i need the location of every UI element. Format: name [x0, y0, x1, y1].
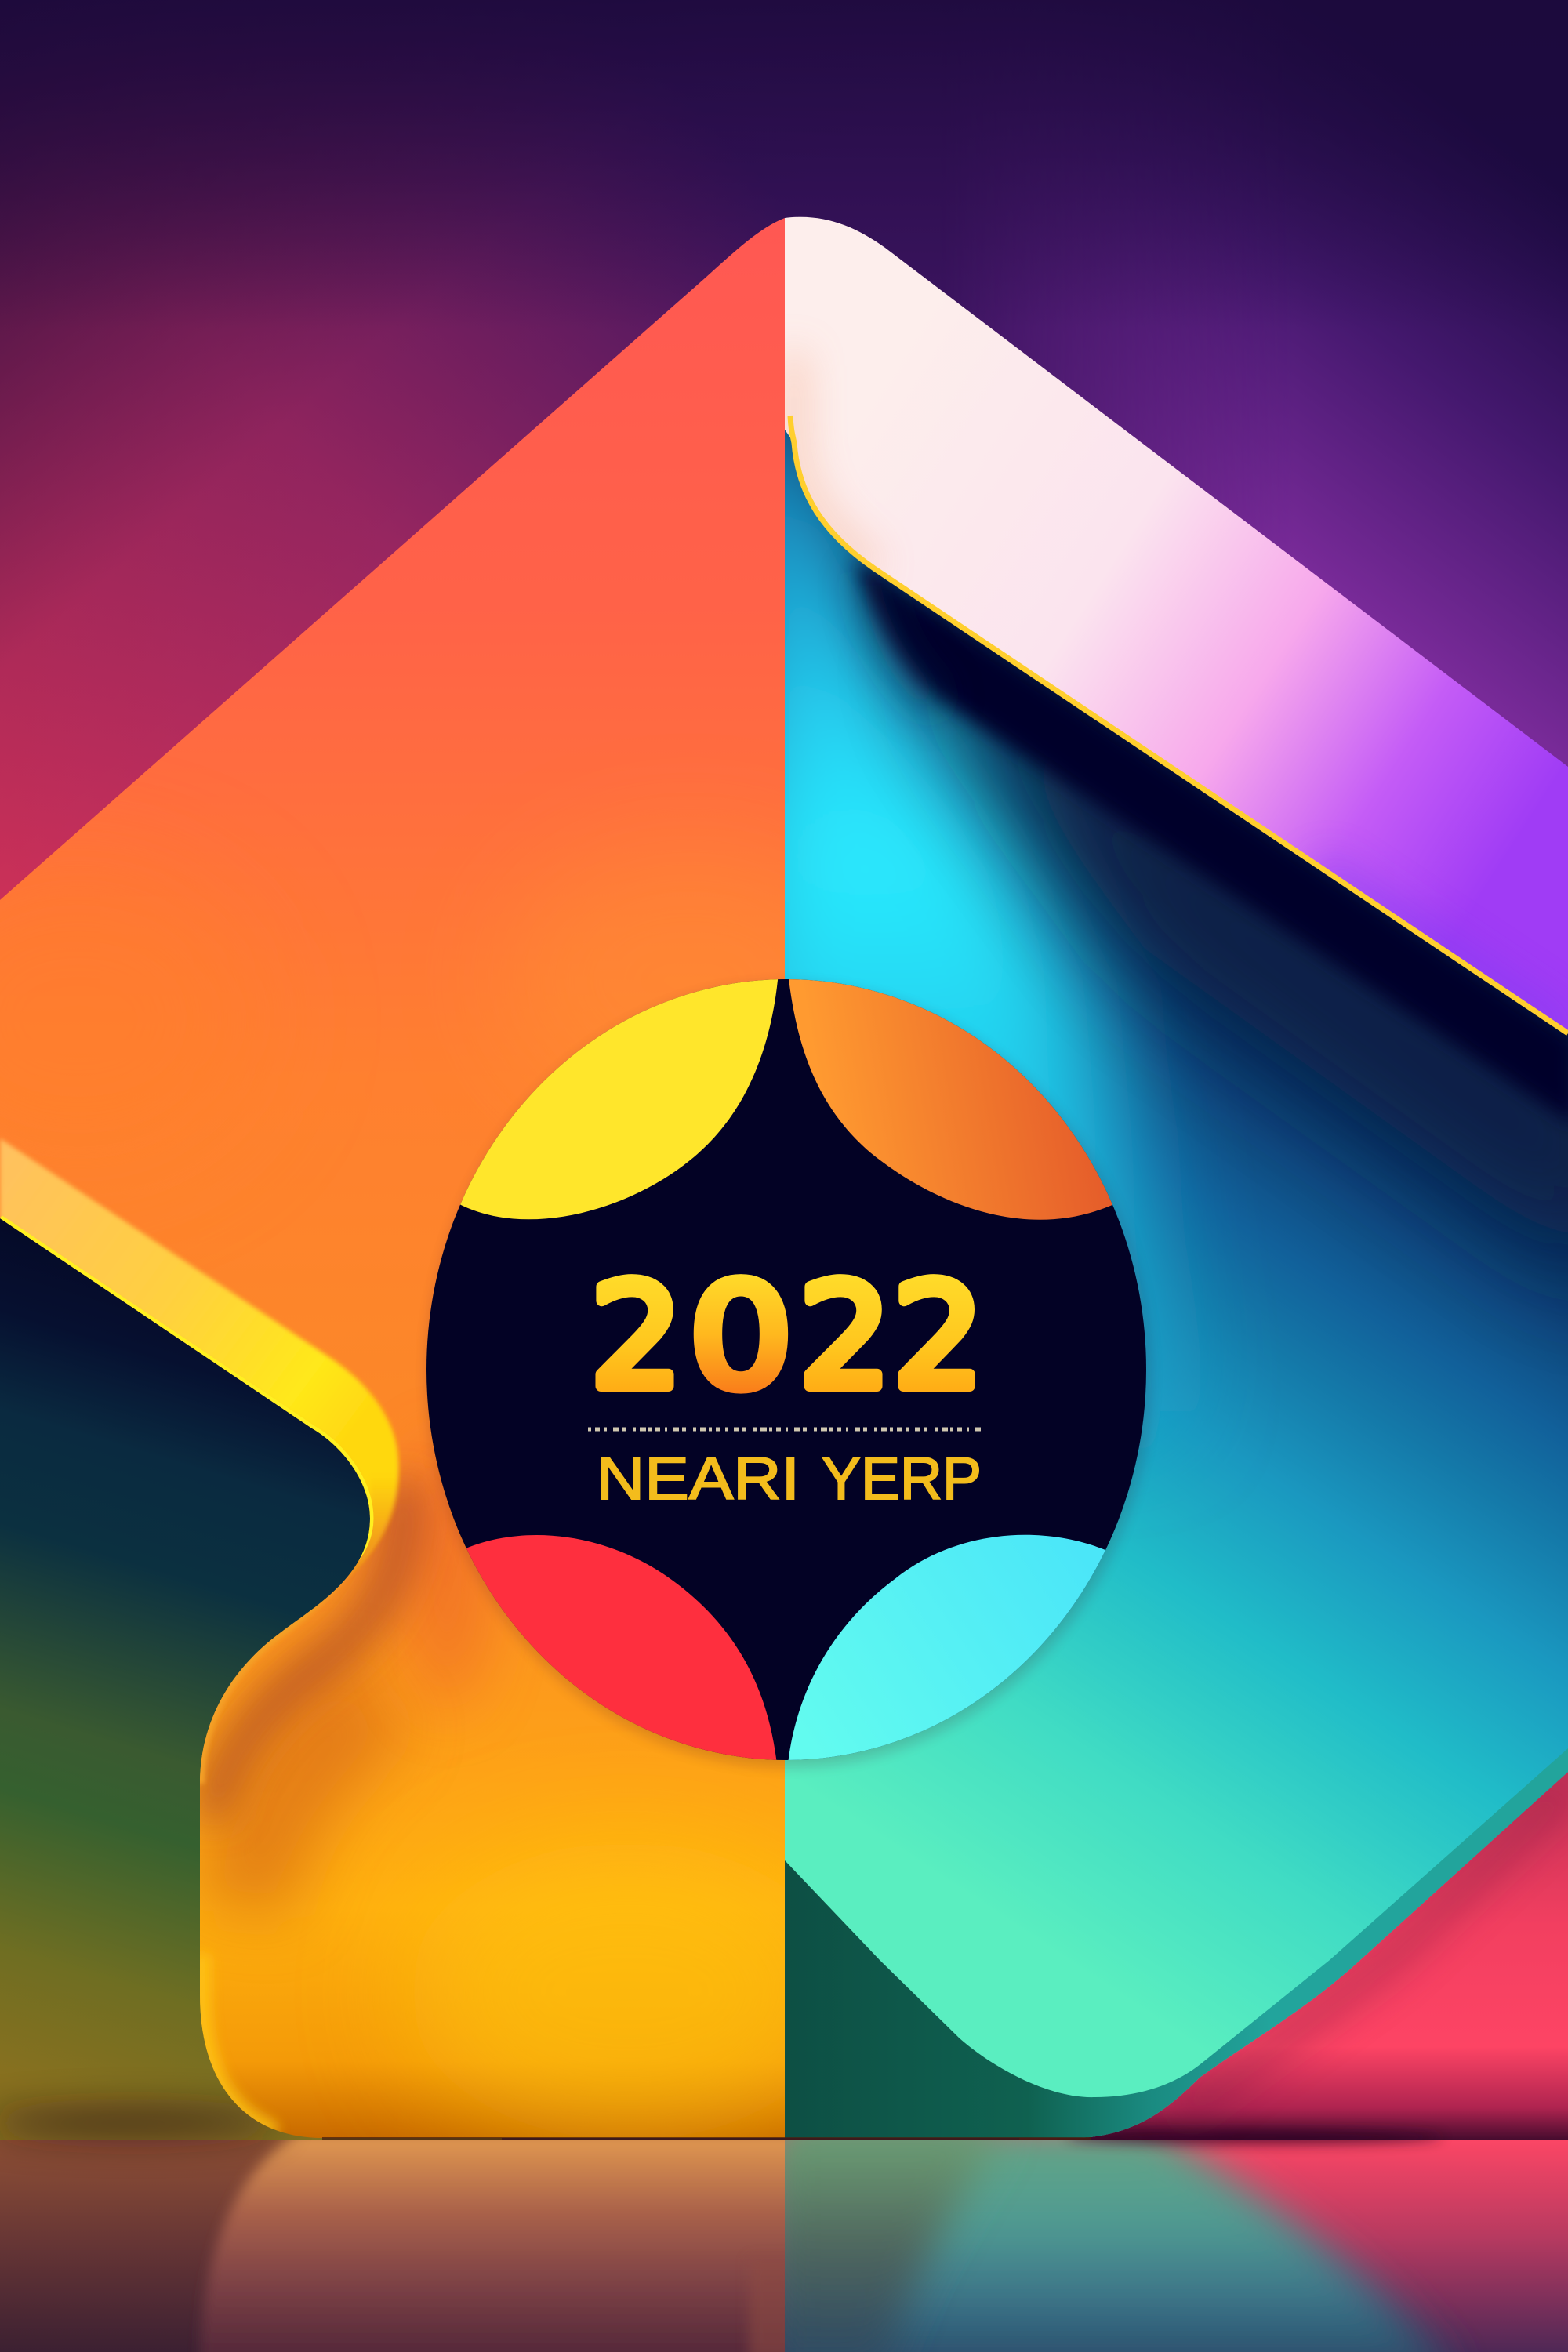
dotted divider line [588, 1427, 984, 1432]
background: lower right crimson panel [1019, 1709, 1568, 2142]
background: dark violet to crimson gradient [0, 19, 1568, 900]
amber lower rim [202, 1960, 270, 2129]
soft shadow around central badge [426, 983, 1151, 1767]
peach curl shading [794, 353, 874, 568]
violet shade at lower edge [1317, 866, 1568, 1033]
mint fold: dark green underside [785, 1748, 1568, 2148]
shadow of the teal shape on the crimson panel [1176, 1788, 1568, 2117]
dark shadow beneath the band [855, 561, 1568, 1127]
heading: year 2022: 0 [689, 1254, 793, 1421]
navy wash below the band shadow [917, 643, 1568, 1286]
floor reflection [0, 2125, 1568, 2352]
rust shadow following the fold [210, 1482, 404, 1819]
subtitle text: NEARI [597, 1446, 800, 1512]
petal: orange [788, 941, 1192, 1220]
floor edge line [322, 2137, 1091, 2140]
heading: year 2022: 2 [590, 1254, 683, 1421]
petal: yellow [376, 941, 779, 1219]
right shape: cyan to teal panel [785, 430, 1568, 2138]
central dark circle badge [376, 941, 1192, 1803]
subtitle text [597, 1446, 982, 1512]
left shape: coral to amber panel [0, 218, 878, 2147]
background: lower left green-olive panel [0, 1098, 502, 2142]
petal: red [376, 1535, 777, 1803]
floor contact shadow [0, 2111, 1443, 2144]
bright rim of fold band [0, 1218, 370, 1564]
heading: year 2022: 2 [893, 1254, 984, 1421]
reddish shade between fold and circle [408, 1443, 486, 1709]
orange rim along the S-curve [200, 1564, 351, 1784]
petal: cyan [788, 1535, 1192, 1803]
white to purple folded band [784, 212, 1568, 1043]
heading: year 2022 [590, 1254, 984, 1421]
heading: year 2022: 2 [799, 1254, 891, 1421]
broad orange shade beneath the S-curve [243, 1693, 376, 1913]
subtitle text: YERP [822, 1446, 982, 1512]
yellow fold band [0, 1138, 401, 1588]
yellow edge line on the band [790, 416, 1568, 1033]
